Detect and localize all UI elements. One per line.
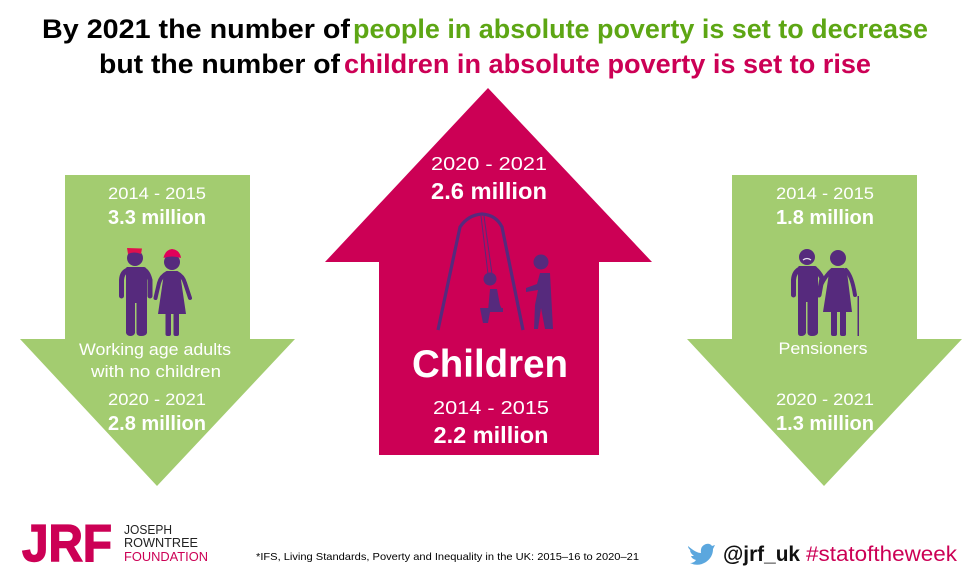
icon: elderly couple with cane bbox=[794, 249, 859, 336]
title: children in absolute poverty is set to rise bbox=[344, 49, 871, 79]
heading: children: Children bbox=[412, 343, 568, 386]
footnote: source: *IFS, Living Standards, Poverty and Inequality in the UK: 2015–16 to 2020–21 bbox=[256, 551, 639, 563]
icon: twitter bird bbox=[688, 544, 715, 565]
icon: man and woman with caps bbox=[122, 248, 190, 336]
title: By 2021 the number of bbox=[42, 14, 351, 44]
text: 1.3 million: 1.3 million bbox=[776, 413, 874, 435]
title: but the number of bbox=[99, 49, 341, 79]
panel: working age adults arrow bbox=[20, 175, 295, 486]
icon: moustache bbox=[803, 258, 811, 260]
text: 2014-2015 working age: 2014 - 2015 bbox=[108, 185, 206, 203]
text: 2.2 million: 2.2 million bbox=[434, 422, 548, 448]
text: pensioners label: Pensioners bbox=[778, 340, 868, 358]
icon: pink hard hat bbox=[164, 249, 181, 258]
text: twitter handle: @jrf_uk bbox=[723, 543, 800, 566]
text: 3.3 million: 3.3 million bbox=[108, 207, 206, 229]
text: 2.6 million: 2.6 million bbox=[431, 178, 547, 204]
panel: pensioners arrow bbox=[687, 175, 962, 486]
logo: JRF Joseph Rowntree Foundation: ROWNTREE bbox=[124, 536, 198, 550]
text: 2014-2015 children: 2014 - 2015 bbox=[433, 397, 549, 418]
text: 2014-2015 pensioners: 2014 - 2015 bbox=[776, 185, 874, 203]
text: working age adults with no children: Working age adults bbox=[79, 341, 231, 359]
text: 2020-2021 working age: 2020 - 2021 bbox=[108, 391, 206, 409]
text: 2020-2021 children: 2020 - 2021 bbox=[431, 153, 547, 174]
panel: children arrow bbox=[325, 88, 652, 455]
panel: working age adults arrow: with no children bbox=[90, 363, 221, 381]
text: 1.8 million: 1.8 million bbox=[776, 207, 874, 229]
text: 2020-2021 pensioners: 2020 - 2021 bbox=[776, 391, 874, 409]
icon: swing and adult pushing child bbox=[438, 214, 553, 330]
icon: red cap bbox=[127, 248, 142, 254]
text: 2.8 million: 2.8 million bbox=[108, 413, 206, 435]
logo: JRF Joseph Rowntree Foundation: JRF bbox=[22, 515, 112, 573]
text: hashtag: #statoftheweek bbox=[806, 543, 958, 566]
title: people in absolute poverty is set to decrease bbox=[353, 14, 928, 44]
logo: JRF Joseph Rowntree Foundation: FOUNDATION bbox=[124, 550, 208, 564]
title bbox=[42, 14, 928, 79]
logo: JRF Joseph Rowntree Foundation bbox=[22, 515, 208, 573]
logo: JRF Joseph Rowntree Foundation: JOSEPH bbox=[124, 523, 172, 537]
